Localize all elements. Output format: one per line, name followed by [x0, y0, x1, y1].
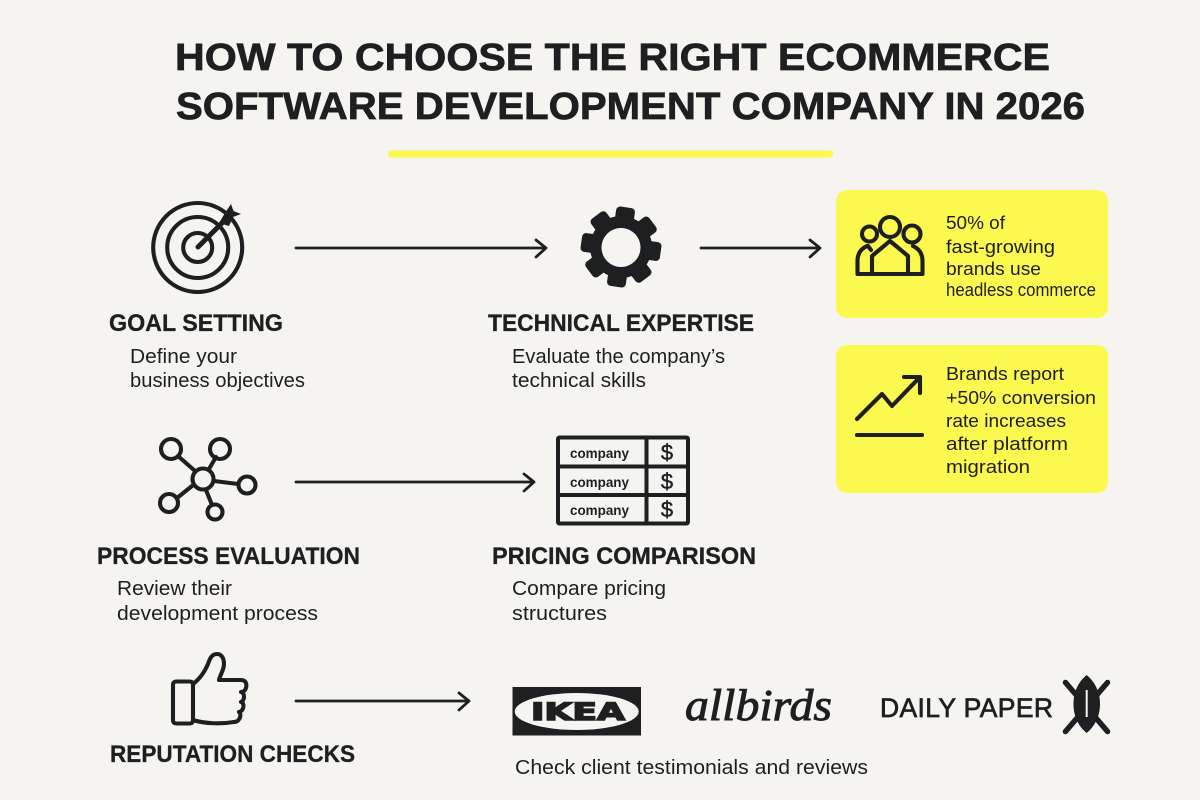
icon: pricing table: $	[661, 497, 673, 522]
panel: conversion rate stat	[836, 345, 1108, 493]
title: HOW TO CHOOSE THE RIGHT ECOMMERCE	[175, 37, 1050, 79]
title underline	[388, 150, 833, 158]
heading: pricing comparison: PRICING COMPARISON	[492, 543, 756, 570]
icon: pricing table	[558, 438, 688, 524]
icon: network	[160, 439, 256, 520]
text: process evaluation description: Review their	[117, 578, 232, 600]
heading: goal setting: GOAL SETTING	[109, 310, 283, 337]
text: conversion rate stat: Brands report	[946, 363, 1064, 384]
icon: people	[858, 217, 922, 274]
panel: headless commerce stat	[836, 190, 1108, 318]
text: pricing comparison description	[512, 578, 666, 625]
text: conversion rate stat: migration	[946, 456, 1030, 477]
text: conversion rate stat: rate increases	[946, 410, 1066, 431]
text: headless commerce stat: fast-growing	[946, 236, 1055, 257]
heading: technical expertise: TECHNICAL EXPERTISE	[488, 310, 754, 337]
icon: pricing table: company	[570, 474, 629, 490]
text: technical expertise description: Evaluate the company’s	[512, 346, 725, 368]
icon: pricing table: $	[661, 440, 673, 465]
text: process evaluation description: development process	[117, 603, 318, 625]
logo: Daily Paper	[880, 675, 1108, 733]
arrow: process to pricing	[296, 474, 534, 491]
text: headless commerce stat: brands use	[946, 258, 1041, 279]
text: technical expertise description	[512, 346, 725, 392]
logo: IKEA: IKEA	[531, 698, 626, 726]
text: headless commerce stat: headless commerce	[946, 279, 1096, 300]
icon: pricing table: $	[661, 469, 673, 494]
icon: pricing table: company	[570, 445, 629, 461]
icon: thumbs up	[173, 654, 246, 724]
text: conversion rate stat: after platform	[946, 433, 1068, 454]
logo: allbirds: allbirds	[685, 681, 832, 730]
arrow: goal to technical	[296, 240, 546, 257]
text: conversion rate stat	[946, 363, 1096, 477]
icon: gear	[580, 206, 662, 288]
title	[175, 37, 1085, 128]
text: pricing comparison description: structures	[512, 603, 607, 625]
text: process evaluation description	[117, 578, 318, 625]
logo: Daily Paper: DAILY PAPER	[880, 693, 1053, 723]
heading: reputation checks: REPUTATION CHECKS	[110, 741, 355, 768]
icon: shield mark	[1066, 675, 1108, 733]
text: technical expertise description: technical skills	[512, 370, 646, 392]
title: SOFTWARE DEVELOPMENT COMPANY IN 2026	[176, 86, 1085, 128]
logo: IKEA	[512, 687, 641, 736]
text: headless commerce stat: 50% of	[946, 212, 1006, 233]
icon: pricing table: company	[570, 502, 629, 518]
text: pricing comparison description: Compare pricing	[512, 578, 666, 600]
icon: target	[153, 203, 242, 292]
arrow: technical to stats	[701, 240, 820, 257]
text: goal setting description: business objectives	[130, 370, 305, 392]
text: goal setting description	[130, 346, 305, 392]
text: check testimonials: Check client testimonials and reviews	[515, 757, 868, 779]
arrow: reputation to brands	[296, 693, 469, 710]
heading: process evaluation: PROCESS EVALUATION	[97, 543, 360, 570]
text: goal setting description: Define your	[130, 346, 237, 368]
text: conversion rate stat: +50% conversion	[946, 387, 1096, 408]
text: headless commerce stat	[946, 212, 1096, 300]
icon: trend line	[857, 377, 922, 435]
